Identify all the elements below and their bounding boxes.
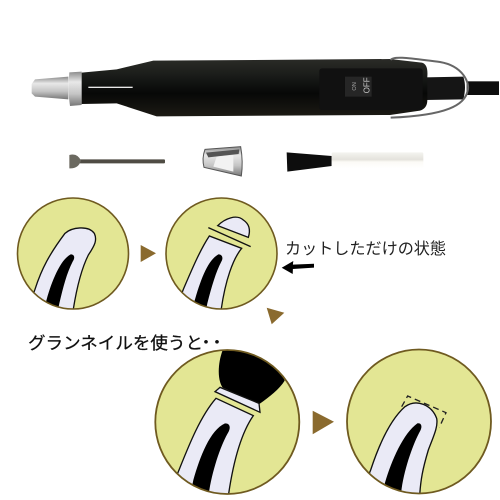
- drill body: [82, 59, 427, 116]
- drill collar: [68, 72, 82, 106]
- wire bail: [391, 58, 468, 118]
- circle 2: cut nail: [166, 198, 277, 313]
- product: nail drill handpiece: [32, 58, 499, 176]
- finished nail: [369, 395, 447, 493]
- caption: using Gran Nail: グランネイルを使うと: [28, 333, 203, 353]
- cut nail: [182, 216, 251, 308]
- arrow: step 3 to 4: [313, 411, 334, 434]
- bit: [69, 154, 165, 168]
- brush: [287, 152, 423, 172]
- caption: using Gran Nail: ・: [209, 335, 225, 352]
- arrow: pointer to cut nail: [282, 261, 314, 274]
- power switch: [345, 77, 372, 97]
- circle 4: finished nail: [347, 350, 491, 500]
- arrow: step 2 to 3: [267, 308, 284, 324]
- caption: using Gran Nail: ・: [198, 335, 214, 352]
- on label: ON: [352, 82, 358, 91]
- cord grip: [425, 77, 465, 100]
- drill cord: [467, 81, 499, 95]
- circle 3: brush on nail: [155, 345, 299, 500]
- switch panel: [319, 68, 423, 110]
- caption: cut only: カットしただけの状態: [285, 240, 446, 258]
- arrow: step 1 to 2: [141, 245, 156, 262]
- off label: OFF: [362, 77, 371, 93]
- drill chuck tip: [32, 77, 68, 99]
- brush and nail: [177, 350, 285, 494]
- metal cap: [203, 147, 242, 176]
- circle 1: original nail: [18, 198, 128, 313]
- body slot: [88, 87, 133, 88]
- nail: [34, 227, 96, 308]
